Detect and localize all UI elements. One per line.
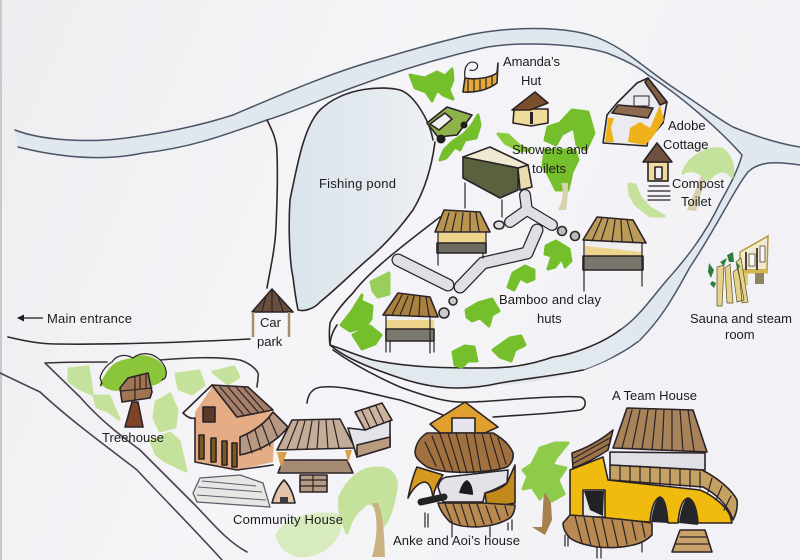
road: car park track	[267, 120, 277, 288]
label: Car park: Car	[260, 315, 282, 330]
label: Sauna and steam room	[690, 311, 792, 342]
greenery: lower-left pale foliage	[69, 367, 239, 471]
walkway: long bent path	[460, 230, 537, 287]
label: Treehouse: Treehouse	[102, 430, 164, 445]
label: Showers and toilets	[512, 142, 588, 176]
walkway: Y-shaped path by showers	[510, 195, 552, 225]
label: Sauna and steam room: room	[725, 327, 755, 342]
label: A Team House: A Team House	[612, 388, 697, 403]
label: Bamboo and clay huts	[499, 292, 602, 326]
icon: car	[427, 107, 472, 144]
label: Community House: Community House	[233, 512, 343, 527]
building: Anke and Aoi's house	[408, 402, 515, 537]
walkway: stepping stones upper	[494, 221, 580, 240]
road: lower-left boundary lines	[0, 358, 258, 560]
building: car park shelter	[252, 289, 293, 337]
label: Adobe Cottage: Adobe	[668, 118, 706, 133]
icon: arrow to main entrance	[17, 314, 43, 322]
label: Car park: park	[257, 334, 283, 349]
road: main entrance road	[8, 337, 250, 344]
label: Fishing pond: Fishing pond	[319, 176, 396, 191]
label: Amanda's Hut: Amanda’s	[503, 54, 560, 69]
tree: pale palms by community house	[277, 468, 396, 557]
building: small hut	[512, 92, 548, 126]
label: Car park	[257, 315, 283, 349]
label: Showers and toilets: Showers and	[512, 142, 588, 157]
label: Sauna and steam room: Sauna and steam	[690, 311, 792, 326]
road: top road with fork	[15, 28, 800, 370]
label: Amanda's Hut	[503, 54, 560, 88]
walkway: stepping stones lower	[439, 297, 457, 318]
greenery: bushes among huts	[341, 241, 571, 367]
building: compost toilet	[643, 143, 672, 200]
label: Adobe Cottage	[663, 118, 709, 152]
walkway: straight path	[398, 260, 448, 285]
building: bamboo hut upper	[435, 210, 490, 265]
tree: palm beside compost toilet	[683, 149, 733, 211]
label: Bamboo and clay huts: Bamboo and clay	[499, 292, 602, 307]
building: sauna and steam room	[740, 236, 768, 285]
label: Compost Toilet	[672, 176, 724, 209]
icon: bamboo cluster	[708, 252, 748, 306]
tree: palm between houses	[523, 443, 568, 535]
tree: treehouse	[100, 354, 166, 427]
road: loop around the huts	[307, 217, 640, 417]
label: Bamboo and clay huts: huts	[537, 311, 562, 326]
building: bamboo hut lower	[383, 293, 438, 353]
label: Showers and toilets: toilets	[532, 161, 566, 176]
building: A Team House	[563, 408, 737, 558]
building: Amanda's hut	[463, 62, 498, 92]
label: Amanda's Hut: Hut	[521, 73, 542, 88]
greenery: upper bushes	[410, 69, 664, 216]
label: Anke and Aoi's house: Anke and Aoi’s house	[393, 533, 520, 548]
building: bamboo hut right	[583, 217, 646, 291]
building: community house	[183, 385, 392, 507]
label: Compost Toilet: Compost	[672, 176, 724, 191]
pond: fishing pond	[289, 88, 435, 311]
label: Adobe Cottage: Cottage	[663, 137, 709, 152]
building: Adobe cottage	[603, 78, 667, 146]
label: Main entrance: Main entrance	[47, 311, 132, 326]
label: Compost Toilet: Toilet	[681, 194, 712, 209]
building: showers and toilets	[463, 147, 532, 217]
